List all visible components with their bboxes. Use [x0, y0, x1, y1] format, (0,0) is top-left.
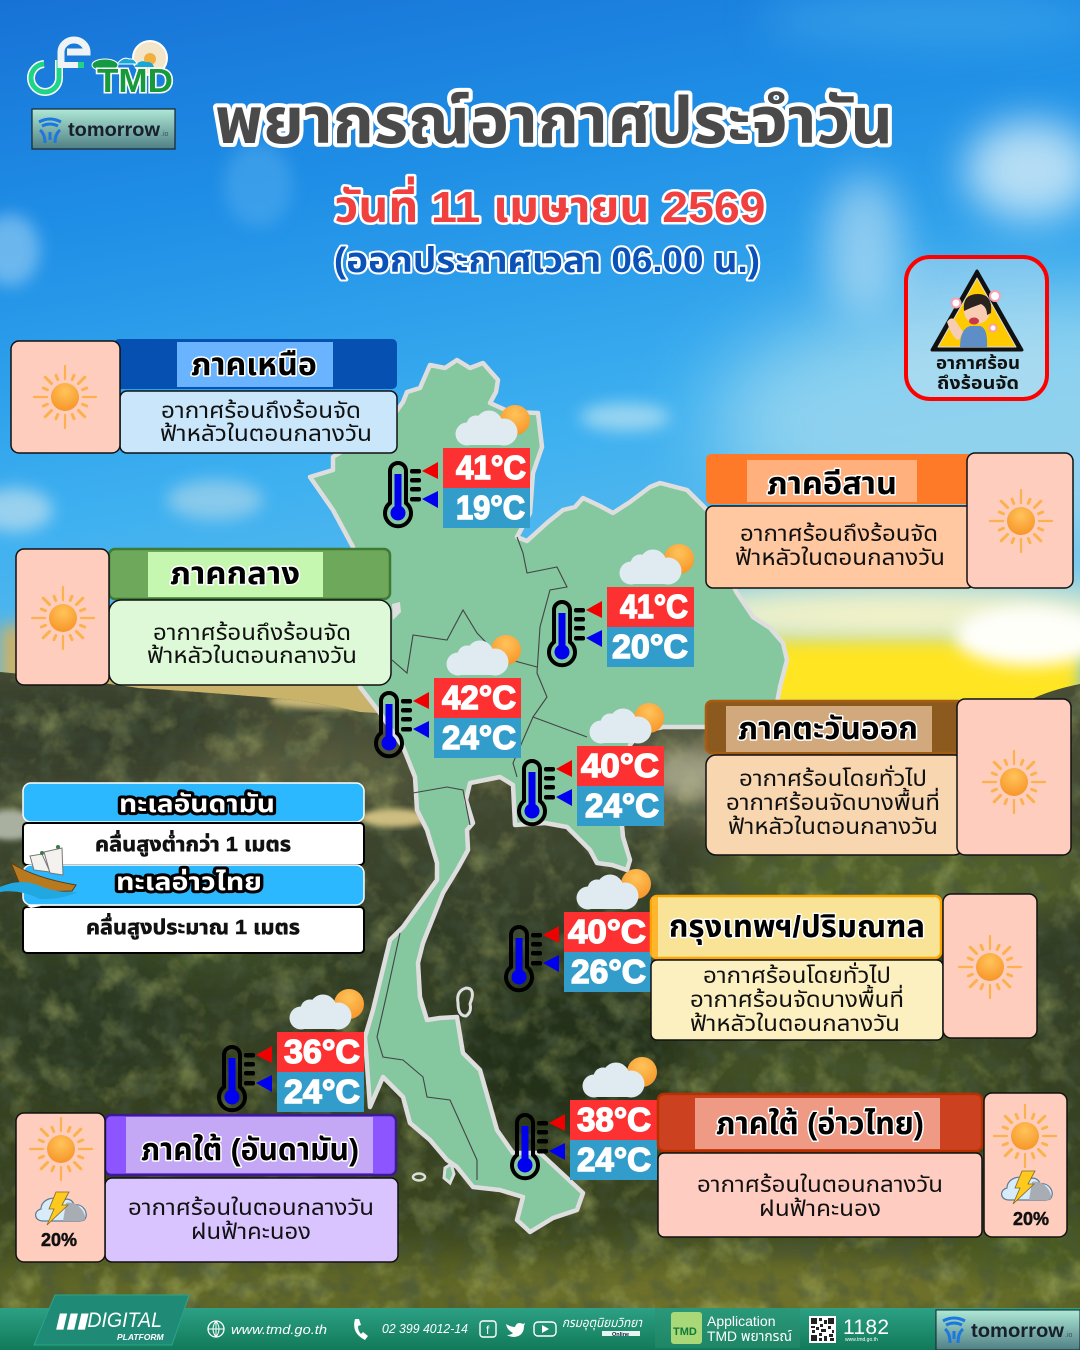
forecast: north region temperatures: 41°C — [456, 449, 526, 486]
date: วันที่ 11 เมษายน 2569 — [334, 176, 766, 232]
QR and hotline: 1182 — [843, 1316, 889, 1339]
central header — [109, 549, 390, 599]
northeast body: ฟ้าหลัวในตอนกลางวัน — [735, 545, 945, 570]
Gulf of Thailand heading: ทะเลอ่าวไทย — [116, 868, 262, 896]
digital platform badge: ▮▮▮DIGITAL — [55, 1309, 162, 1332]
website: www.tmd.go.th — [231, 1322, 327, 1337]
north weather icon — [11, 341, 120, 453]
panel: sea conditions — [0, 783, 364, 953]
department name: กรมอุตุนิยมวิทยา — [562, 1315, 643, 1331]
north header — [114, 339, 397, 389]
Andaman wave height — [23, 823, 364, 865]
east body — [706, 755, 964, 855]
central weather icon — [16, 549, 109, 685]
forecast: north region temperatures — [385, 405, 530, 528]
forecast: south Gulf temperatures: 38°C — [577, 1101, 651, 1138]
title: พยากรณ์อากาศประจำวัน — [215, 84, 893, 157]
panel: northeast — [706, 453, 1073, 588]
east body: ฟ้าหลัวในตอนกลางวัน — [728, 814, 938, 839]
legend: extreme heat warning: ถึงร้อนจัด — [937, 373, 1019, 393]
Gulf wave height: คลื่นสูงประมาณ 1 เมตร — [86, 913, 300, 939]
forecast: south Andaman temperatures — [219, 989, 364, 1112]
forecast: south Andaman temperatures: 36°C — [284, 1033, 360, 1070]
footer bar — [0, 1295, 1080, 1350]
south Andaman body: อากาศร้อนในตอนกลางวัน — [128, 1195, 374, 1220]
panel: Bangkok and vicinity — [651, 894, 1037, 1040]
northeast header: ภาคอีสาน — [767, 466, 897, 501]
Andaman sea heading — [23, 783, 364, 822]
logo: tomorrow.io — [32, 109, 175, 149]
north body: ฟ้าหลัวในตอนกลางวัน — [160, 421, 372, 446]
northeast header — [706, 454, 974, 504]
central body — [109, 600, 391, 685]
forecast: south Andaman temperatures: 24°C — [284, 1073, 360, 1110]
map of Thailand — [310, 360, 787, 1232]
logo: DE and TMD: TMD — [97, 62, 173, 99]
digital platform badge — [34, 1295, 189, 1345]
QR and hotline: www.tmd.go.th — [845, 1337, 878, 1343]
application: Application — [707, 1313, 776, 1329]
central body: อากาศร้อนถึงร้อนจัด — [153, 620, 351, 645]
tomorrow badge: .io — [1065, 1332, 1072, 1339]
Bangkok body: อากาศร้อนโดยทั่วไป — [703, 961, 891, 988]
digital platform badge: PLATFORM — [117, 1332, 165, 1342]
social icons: f — [486, 1323, 490, 1337]
tomorrow badge — [936, 1310, 1080, 1350]
Bangkok body: อากาศร้อนจัดบางพื้นที่ — [690, 984, 904, 1012]
south Gulf body: ฝนฟ้าคะนอง — [759, 1196, 881, 1221]
northeast weather icon — [967, 453, 1073, 588]
panel: south Gulf of Thailand — [658, 1093, 1067, 1237]
forecast: south Gulf temperatures: 24°C — [577, 1141, 651, 1178]
logo: tomorrow.io: .io — [161, 131, 168, 138]
south Gulf body: อากาศร้อนในตอนกลางวัน — [697, 1172, 943, 1197]
tomorrow badge: tomorrow — [971, 1320, 1065, 1342]
south Andaman body: ฝนฟ้าคะนอง — [191, 1219, 311, 1244]
legend: extreme heat warning — [906, 257, 1047, 399]
phone: 02 399 4012-14 — [382, 1321, 468, 1336]
south Andaman weather icon — [16, 1113, 105, 1262]
Andaman sea heading: ทะเลอันดามัน — [119, 790, 275, 818]
south Gulf body — [658, 1153, 982, 1237]
application: TMD พยากรณ์ — [707, 1328, 792, 1344]
Bangkok body — [651, 960, 943, 1040]
Bangkok body: ฟ้าหลัวในตอนกลางวัน — [690, 1011, 900, 1036]
south Andaman body — [105, 1178, 398, 1262]
east body: อากาศร้อนโดยทั่วไป — [739, 764, 927, 791]
department name — [562, 1315, 643, 1338]
forecast: east temperatures — [519, 703, 664, 826]
QR and hotline — [809, 1316, 889, 1343]
Bangkok header: กรุงเทพฯ/ปริมณฑล — [669, 909, 925, 945]
panel: central — [16, 549, 391, 685]
north body — [120, 391, 397, 453]
east body: อากาศร้อนจัดบางพื้นที่ — [726, 787, 940, 815]
panel: east — [706, 699, 1071, 855]
phone — [354, 1319, 468, 1340]
forecast: Bangkok temperatures: 40°C — [568, 913, 646, 950]
forecast: northeast temperatures: 20°C — [612, 628, 688, 665]
panel: north — [11, 339, 397, 453]
south Andaman weather icon: 20% — [41, 1230, 77, 1250]
north body: อากาศร้อนถึงร้อนจัด — [161, 398, 361, 423]
forecast: northeast temperatures: 41°C — [620, 588, 688, 625]
website — [208, 1321, 327, 1337]
logo: DE and TMD — [31, 40, 173, 99]
forecast: east temperatures: 24°C — [585, 787, 659, 824]
legend: extreme heat warning: อากาศร้อน — [936, 353, 1020, 373]
forecast: south Gulf temperatures — [512, 1057, 657, 1180]
central body: ฟ้าหลัวในตอนกลางวัน — [147, 643, 357, 668]
north header: ภาคเหนือ — [191, 347, 317, 382]
east weather icon — [957, 699, 1071, 855]
south Gulf weather icon: 20% — [1013, 1209, 1049, 1229]
central header: ภาคกลาง — [170, 556, 300, 591]
social icons — [480, 1321, 556, 1337]
panel: south Andaman — [16, 1113, 398, 1262]
forecast: central temperatures: 24°C — [442, 719, 516, 756]
forecast: Bangkok temperatures — [506, 869, 651, 992]
south Andaman header — [105, 1115, 396, 1175]
forecast: central temperatures: 42°C — [442, 679, 516, 716]
northeast body — [706, 506, 974, 588]
east header: ภาคตะวันออก — [738, 711, 918, 746]
Bangkok header — [651, 896, 941, 958]
logo: tomorrow.io: tomorrow — [68, 119, 161, 141]
forecast: east temperatures: 40°C — [581, 747, 659, 784]
forecast: central temperatures — [376, 635, 521, 758]
south Gulf header — [658, 1094, 982, 1151]
forecast: northeast temperatures — [549, 544, 694, 667]
issue time: (ออกประกาศเวลา 06.00 น.) — [334, 241, 760, 280]
south Andaman header: ภาคใต้ (อันดามัน) — [141, 1132, 359, 1167]
department name: Online — [612, 1332, 629, 1338]
Gulf of Thailand heading — [23, 865, 364, 905]
Bangkok weather icon — [943, 894, 1037, 1038]
application: TMD — [673, 1326, 697, 1338]
forecast: north region temperatures: 19°C — [456, 489, 525, 526]
application — [655, 1308, 800, 1348]
Andaman wave height: คลื่นสูงต่ำกว่า 1 เมตร — [95, 830, 291, 856]
east header — [706, 701, 964, 753]
northeast body: อากาศร้อนถึงร้อนจัด — [740, 521, 938, 546]
south Gulf weather icon — [984, 1093, 1067, 1237]
forecast: Bangkok temperatures: 26°C — [571, 953, 646, 990]
south Gulf header: ภาคใต้ (อ่าวไทย) — [716, 1106, 924, 1141]
Gulf wave height — [23, 907, 364, 953]
icon: ship — [0, 845, 78, 908]
